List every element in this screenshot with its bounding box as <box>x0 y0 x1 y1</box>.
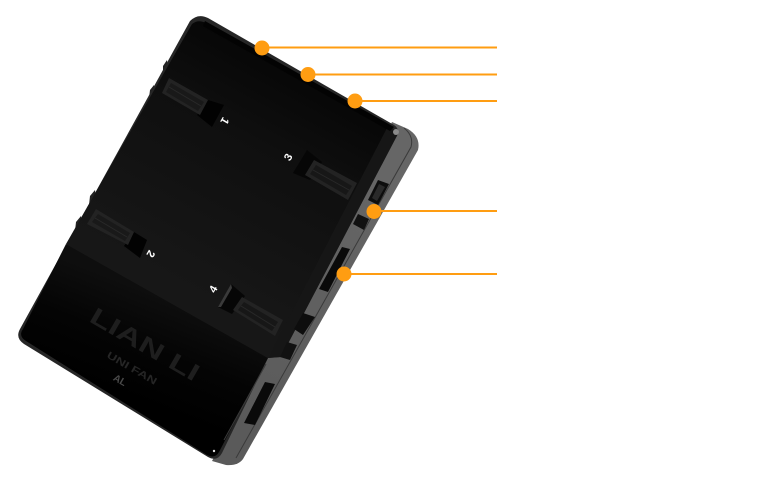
number 3: 3 <box>282 152 296 163</box>
front plate outline <box>18 16 398 459</box>
bumps on left edge <box>75 60 168 231</box>
clip 2 <box>87 209 147 258</box>
lower second connector <box>280 342 297 360</box>
clip 3 <box>293 150 357 200</box>
callout 4 <box>366 204 497 219</box>
callout 2 <box>300 67 497 82</box>
callout 1 <box>254 40 497 56</box>
label: UNI FAN: UNI FAN <box>105 350 158 388</box>
long slot upper <box>319 247 350 292</box>
front plate matte section <box>66 21 390 358</box>
clip 4 <box>218 284 283 336</box>
logo: LIAN LI: LIAN LI <box>85 303 204 387</box>
number 2: 2 <box>143 248 157 259</box>
side ports <box>244 180 389 425</box>
upper connector <box>368 180 389 205</box>
dark rim band along right side <box>268 126 399 358</box>
side wall <box>212 122 419 465</box>
callout 5 <box>336 266 497 282</box>
number 1: 1 <box>217 115 231 126</box>
clip 1 <box>162 78 224 127</box>
long slot lower <box>244 382 275 425</box>
embossed logo text <box>85 303 204 389</box>
lower connector <box>294 313 315 335</box>
callout 3 <box>348 94 497 108</box>
label: AL: AL <box>111 373 128 389</box>
device body <box>18 16 419 465</box>
glossy reflection <box>224 364 266 440</box>
corner screw <box>393 129 399 135</box>
second connector <box>353 214 369 230</box>
front plate glossy section <box>21 244 268 456</box>
port numbers <box>143 115 296 295</box>
number 4: 4 <box>207 283 221 295</box>
